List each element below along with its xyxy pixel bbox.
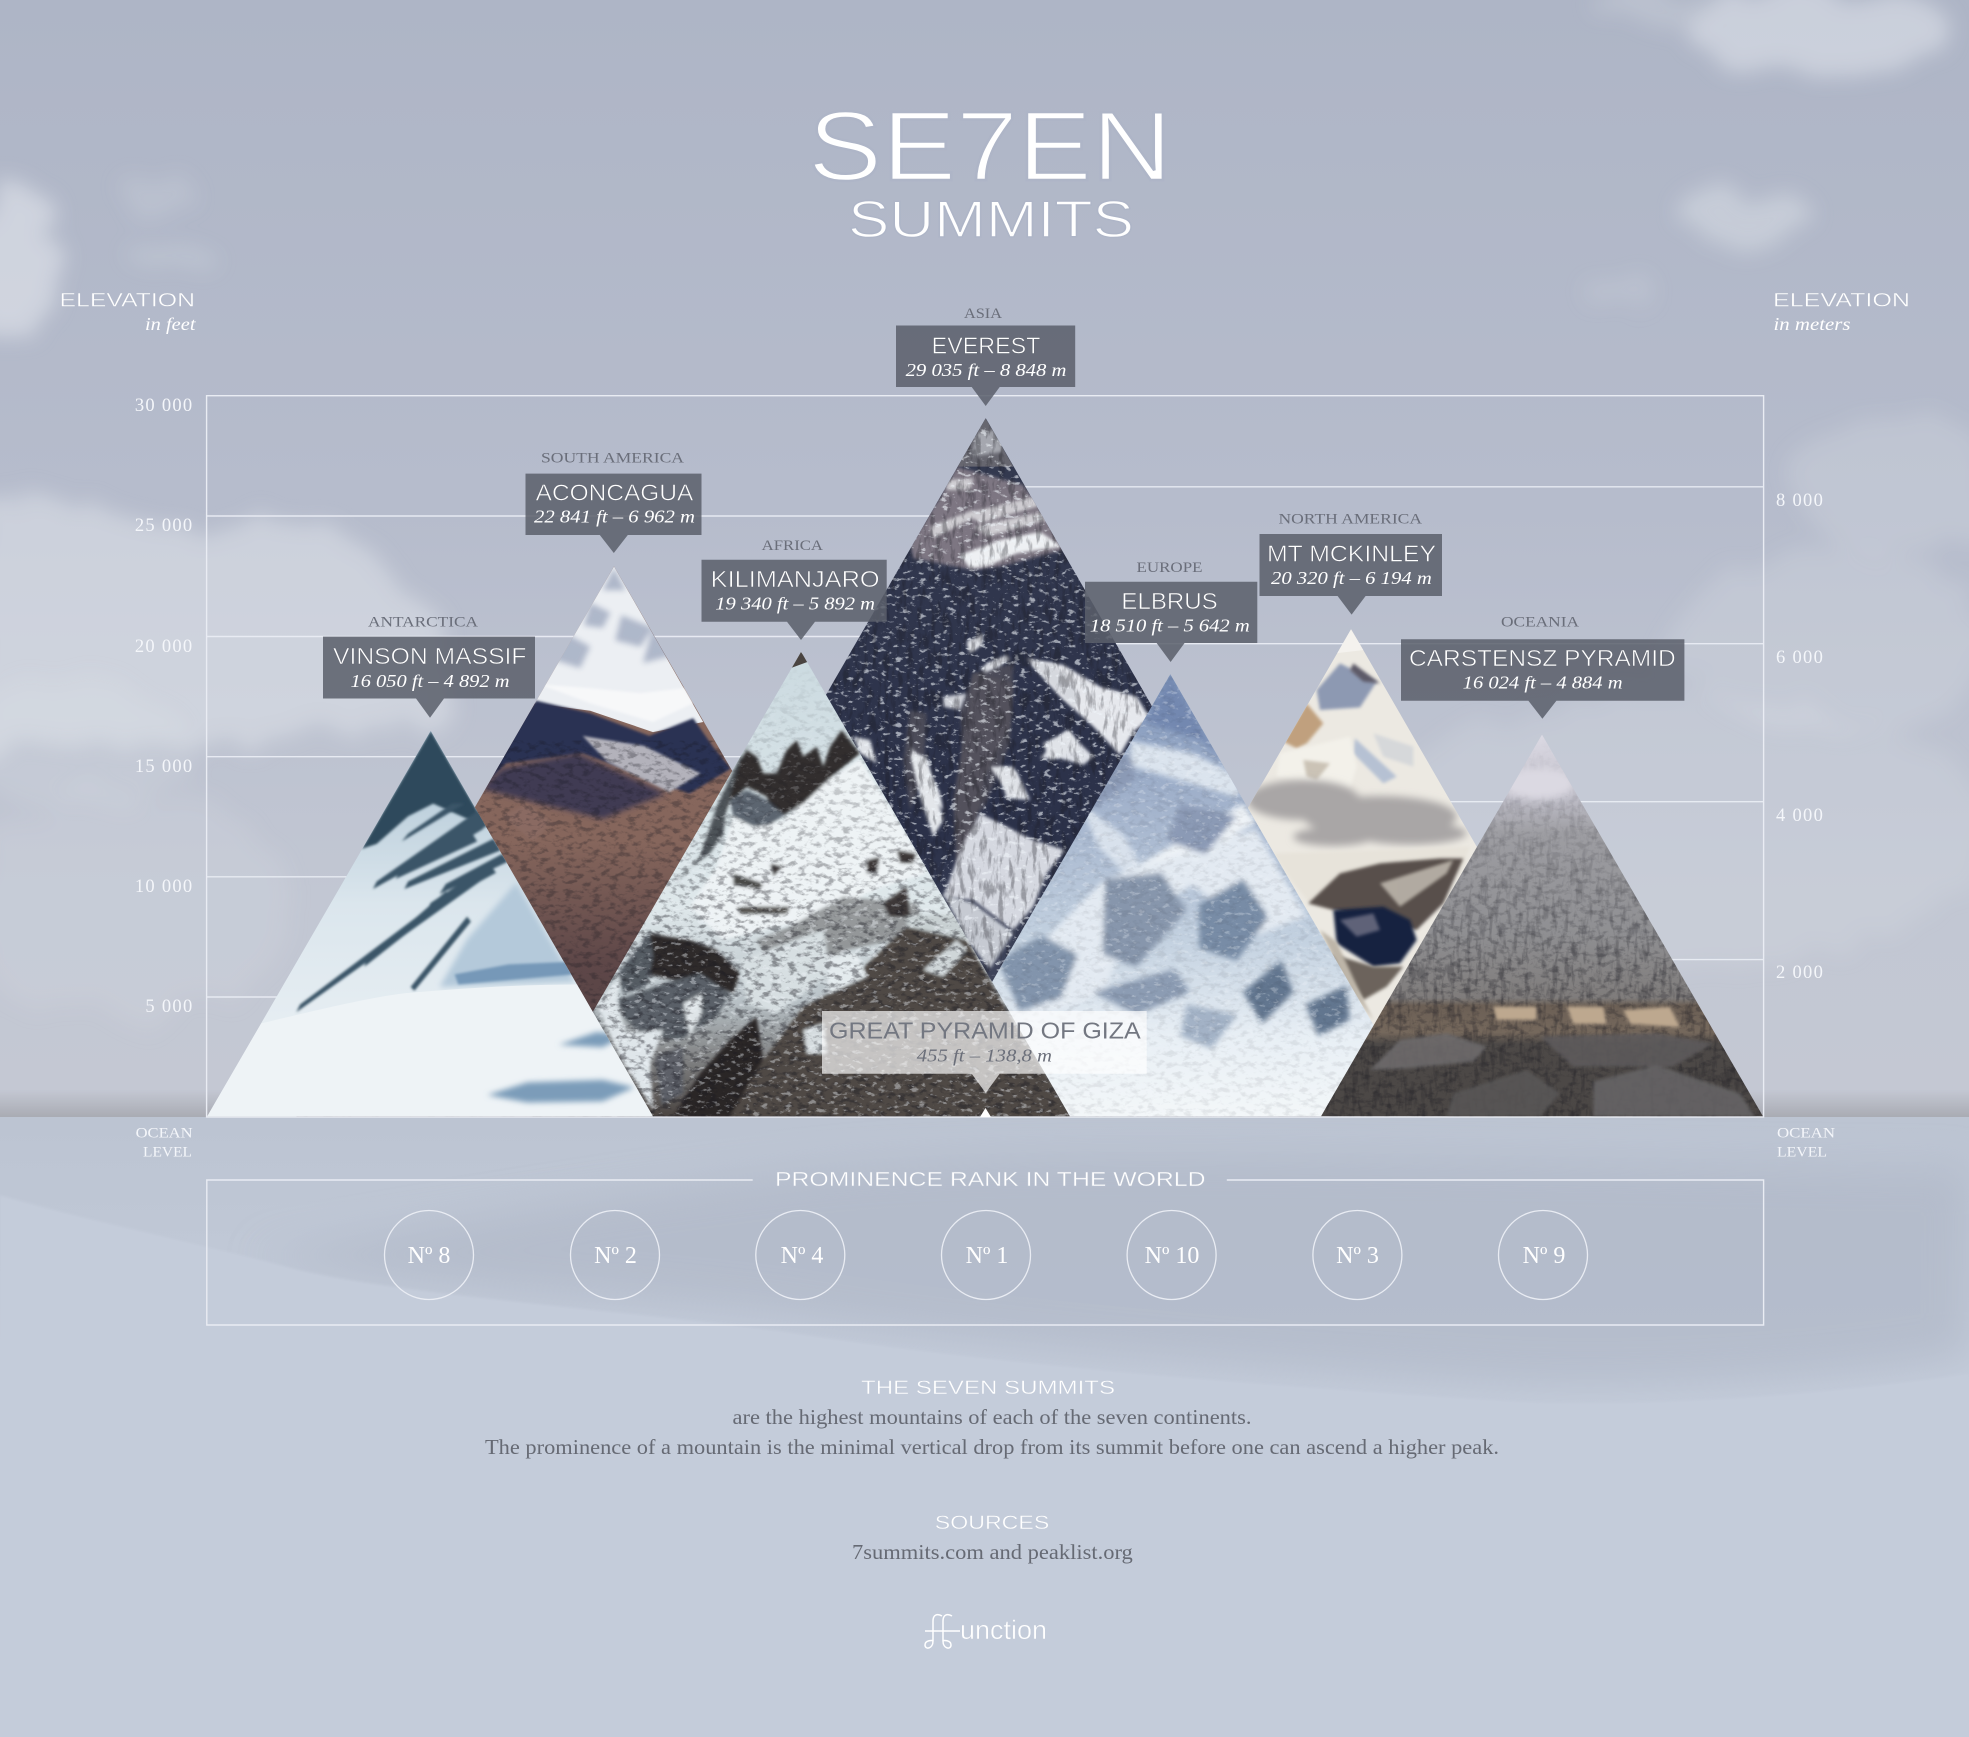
left axis labels: 30 000 [135,396,194,416]
label: Carstensz Pyramid: CARSTENSZ PYRAMID [1409,645,1676,671]
rank numbers [408,1243,1565,1269]
mountains [207,418,1763,1117]
rank numbers: Nº 2 [594,1243,637,1269]
mountain: Kilimanjaro [532,652,1070,1117]
label: Aconcagua: SOUTH AMERICA [541,451,684,467]
left axis labels: 25 000 [135,516,194,536]
label: Elbrus [1085,560,1257,662]
label: Great Pyramid of Giza: 455 ft – 138,8 m [917,1046,1052,1066]
right axis labels: 6 000 [1776,648,1824,668]
text block: sources [852,1513,1133,1564]
mountain: Vinson Massif [207,731,653,1116]
right axis labels: 4 000 [1776,806,1824,826]
text block: description: are the highest mountains of each of the seven continents. [732,1405,1252,1429]
label: Everest: EVEREST [932,332,1040,358]
label: Kilimanjaro [702,538,887,640]
rank numbers: Nº 4 [781,1243,823,1269]
gridlines in meters [1000,487,1763,960]
left axis labels: 20 000 [135,637,194,657]
chart frame [207,396,1764,1117]
label: Elbrus: ELBRUS [1121,588,1218,614]
label: Elbrus: 18 510 ft – 5 642 m [1090,616,1250,636]
rank numbers: Nº 3 [1336,1243,1379,1269]
right axis heading: in meters [1774,314,1850,334]
label: Vinson Massif: VINSON MASSIF [333,643,526,669]
right axis labels: 2 000 [1776,963,1824,983]
Great Pyramid marker triangle [980,1108,991,1117]
label: Kilimanjaro: AFRICA [762,538,823,554]
ocean level labels: OCEAN [1777,1126,1835,1142]
label: Vinson Massif: ANTARCTICA [368,615,478,631]
label: Great Pyramid of Giza: GREAT PYRAMID OF GIZA [829,1018,1141,1044]
rank circles [384,1210,1588,1300]
label: Aconcagua: 22 841 ft – 6 962 m [534,506,695,526]
ocean level labels: OCEAN [136,1126,193,1142]
label: Everest: ASIA [964,306,1002,322]
text block: sources: 7summits.com and peaklist.org [852,1540,1133,1564]
left axis labels: 5 000 [145,997,194,1017]
ocean level labels [136,1126,1835,1161]
label: Everest [896,306,1075,406]
label: Aconcagua [526,451,702,553]
title [808,91,1172,249]
label: Vinson Massif: 16 050 ft – 4 892 m [350,671,510,691]
label: Carstensz Pyramid: OCEANIA [1501,615,1579,631]
title: SE7EN [808,91,1172,201]
mountain: Carstensz Pyramid [1321,735,1763,1117]
background: snow ground with dunes [0,1117,1969,1737]
left axis labels: 15 000 [135,757,194,777]
logo: ffunction: unction [960,1615,1047,1645]
rank numbers: Nº 9 [1523,1243,1565,1269]
label: Elbrus: EUROPE [1136,560,1202,576]
label: Mt McKinley [1260,512,1442,615]
label: Kilimanjaro: KILIMANJARO [711,566,880,592]
label: Vinson Massif [323,615,535,718]
label: Great Pyramid of Giza [822,1011,1147,1093]
label: Carstensz Pyramid: 16 024 ft – 4 884 m [1463,673,1623,693]
ocean level labels: LEVEL [1777,1145,1827,1161]
mountain: McKinley [1070,628,1632,1116]
title: SUMMITS [848,191,1134,249]
label: Everest: 29 035 ft – 8 848 m [906,360,1066,380]
text block: description [485,1378,1499,1459]
heading: prominence rank: PROMINENCE RANK IN THE WORLD [775,1169,1206,1191]
panel: prominence rank [207,1169,1764,1325]
gridlines in feet [206,516,985,997]
rank numbers: Nº 8 [408,1243,450,1269]
mountain: Elbrus [914,674,1426,1116]
left axis heading: in feet [145,314,197,334]
mountain: Aconcagua [296,566,932,1116]
background: sky with clouds [0,0,1969,1120]
rank numbers: Nº 1 [966,1243,1008,1269]
text block: description: The prominence of a mountain is the minimal vertical drop from its summit before one can ascend a higher peak. [485,1435,1499,1459]
label: Mt McKinley: 20 320 ft – 6 194 m [1271,568,1432,588]
horizon shadow band [0,1090,1969,1117]
text block: description: THE SEVEN SUMMITS [861,1378,1115,1399]
left axis heading [60,290,197,334]
left axis labels: 10 000 [135,877,194,897]
label: Aconcagua: ACONCAGUA [536,480,694,506]
label: Kilimanjaro: 19 340 ft – 5 892 m [715,594,875,614]
mountain: Everest [583,418,1389,1116]
right axis heading [1773,290,1910,334]
logo: ffunction [925,1615,1047,1648]
left axis labels [135,396,194,1017]
label: Mt McKinley: MT MCKINLEY [1267,540,1436,566]
ocean level labels: LEVEL [143,1145,192,1161]
right axis labels: 8 000 [1776,491,1824,511]
left axis heading: ELEVATION [60,290,195,312]
right axis labels [1776,491,1824,983]
label: Mt McKinley: NORTH AMERICA [1278,512,1422,528]
text block: sources: SOURCES [935,1513,1049,1534]
label: Carstensz Pyramid [1401,615,1684,719]
right axis heading: ELEVATION [1773,290,1910,312]
rank numbers: Nº 10 [1145,1243,1199,1269]
